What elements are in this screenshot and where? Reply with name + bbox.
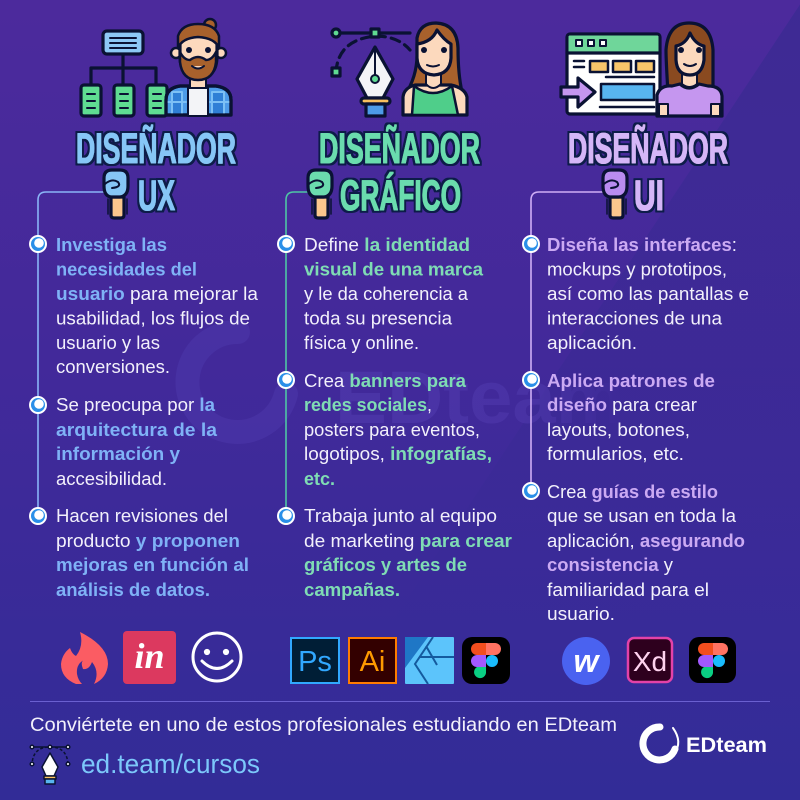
text: gráfico responsibilities: Crea banners para (304, 371, 467, 391)
text: gráfico responsibilities: Define la identidad (304, 235, 470, 255)
text: gráfico responsibilities: logotipos, infografías, (304, 444, 492, 464)
icon: interface window (561, 34, 660, 114)
watermark logo: EDteam (335, 356, 625, 439)
tools: gráfico (291, 637, 510, 684)
icon: webflow (562, 637, 610, 685)
text: UI responsibilities: usuario. (547, 604, 615, 624)
timeline: UX (30, 192, 104, 524)
course link: ed.team/cursos (81, 749, 260, 779)
text: UX responsibilities: conversiones. (56, 357, 170, 377)
text: UX responsibilities: arquitectura de la (56, 420, 218, 440)
text: UI responsibilities: formularios, etc. (547, 444, 684, 464)
text: gráfico responsibilities: y le da coherencia a (304, 284, 469, 304)
icon: adobe xd (628, 638, 672, 682)
tools: UX (61, 631, 241, 684)
icon: illustrator (349, 638, 396, 683)
icon: affinity designer (405, 637, 454, 684)
icon: sitemap (81, 31, 167, 116)
text: UI responsibilities: Crea guías de estilo (547, 482, 718, 502)
icon: adobe xd: Xd (633, 646, 667, 677)
text: UX responsibilities: mejoras en función al (56, 555, 249, 575)
panel: diseñador gráfico (278, 23, 512, 684)
title: diseñador gráfico (319, 125, 480, 220)
icon: tinder flame (61, 632, 108, 684)
text: gráfico responsibilities: visual de una marca (304, 260, 484, 280)
text: gráfico responsibilities: campañas. (304, 580, 400, 600)
text: UX responsibilities: usabilidad, los flujos de (56, 308, 250, 328)
text: UI responsibilities (547, 235, 749, 624)
timeline: gráfico (278, 192, 310, 524)
text: UI responsibilities: Diseña las interfaces : (547, 235, 737, 255)
text: gráfico responsibilities: redes sociales, (304, 395, 432, 415)
title: diseñador UX (76, 125, 236, 220)
icon: webflow: w (574, 643, 601, 679)
panel: diseñador UI (523, 23, 749, 685)
footer (30, 701, 770, 784)
icon: illustrator: Ai (360, 646, 385, 678)
icon: figma (462, 637, 510, 684)
icon: figma (689, 637, 736, 683)
title: diseñador gráfico: GRÁFICO (340, 172, 461, 220)
title: diseñador UX: DISEÑADOR (76, 125, 236, 173)
text: gráfico responsibilities: toda su presencia (304, 308, 453, 328)
text: UX responsibilities: usuario y las (56, 333, 160, 353)
title: diseñador gráfico: DISEÑADOR (319, 125, 480, 173)
text: UX responsibilities: Investiga las (56, 235, 167, 255)
icon: pen tool (332, 29, 410, 116)
text: UX responsibilities: Se preocupa por la (56, 395, 216, 415)
watermark logo (187, 332, 625, 439)
icon: photoshop (291, 638, 339, 683)
icon: photoshop: Ps (298, 646, 332, 678)
icon: invision (123, 631, 176, 684)
text: UI responsibilities: Aplica patrones de (547, 371, 715, 391)
text: gráfico responsibilities: gráficos y artes de (304, 555, 467, 575)
text: UX responsibilities (56, 235, 259, 600)
text: UI responsibilities: consistencia y (547, 555, 673, 575)
text: UX responsibilities: producto y proponen (56, 531, 240, 551)
title: diseñador UI (568, 125, 728, 220)
text: gráfico responsibilities: etc. (304, 469, 335, 489)
title: diseñador UX: UX (138, 172, 175, 220)
text: gráfico responsibilities: física y online. (304, 333, 419, 353)
text: UI responsibilities: diseño para crear (547, 395, 697, 415)
text: gráfico responsibilities: posters para eventos, (304, 420, 480, 440)
text: UI responsibilities: aplicación, asegurando (547, 531, 745, 551)
tools: UI (562, 637, 736, 685)
icon: pen tool small (30, 745, 70, 784)
icon: woman purple top (657, 23, 722, 116)
EDteam logo: EDteam (686, 733, 767, 757)
text: gráfico responsibilities: Trabaja junto al equipo (304, 506, 497, 526)
text: UX responsibilities: necesidades del (56, 260, 197, 280)
icon: hand with mouse (308, 170, 332, 218)
icon: bearded man (166, 19, 231, 116)
text: UX responsibilities: análisis de datos. (56, 580, 210, 600)
text: UI responsibilities: aplicación. (547, 333, 637, 353)
text: UI responsibilities: mockups y prototipos, (547, 260, 727, 280)
text: UI responsibilities: así como las pantallas e (547, 284, 749, 304)
panel: diseñador UX (30, 19, 259, 684)
text: UX responsibilities: Hacen revisiones del (56, 506, 228, 526)
text: UX responsibilities: información y (56, 444, 180, 464)
text: UI responsibilities: familiaridad para el (547, 580, 709, 600)
icon: hand with mouse (603, 170, 627, 218)
text: gráfico responsibilities: de marketing para crear (304, 531, 512, 551)
text: UX responsibilities: accesibilidad. (56, 469, 167, 489)
icon: woman green top (403, 23, 467, 115)
text: UI responsibilities: interacciones de una (547, 308, 723, 328)
icon: hand with mouse (104, 170, 128, 218)
text: UI responsibilities: que se usan en toda la (547, 506, 737, 526)
title: diseñador UI: UI (634, 172, 664, 220)
timeline: UI (523, 192, 604, 499)
text: UI responsibilities: layouts, botones, (547, 420, 690, 440)
text: gráfico responsibilities (304, 235, 512, 600)
text: UX responsibilities: usuario para mejorar la (56, 284, 259, 304)
EDteam logo (643, 727, 767, 760)
icon: invision: in (134, 636, 165, 676)
icon: smile (193, 633, 241, 681)
footer text: Conviértete en uno de estos profesionales estudiando en EDteam (30, 714, 617, 736)
